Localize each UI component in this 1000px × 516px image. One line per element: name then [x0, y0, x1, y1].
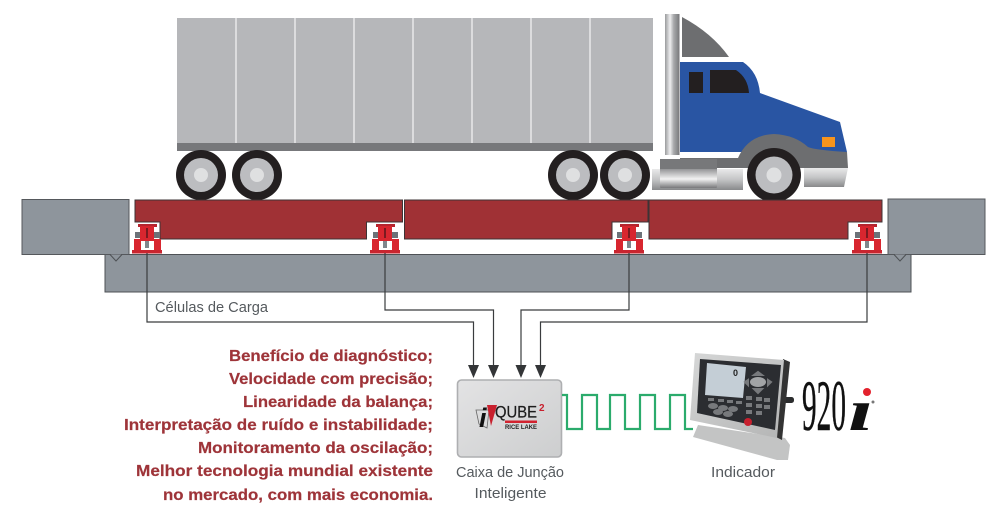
benefits list: Velocidade com precisão; [229, 371, 433, 388]
load cell label: Células de Carga [155, 300, 269, 316]
scale deck [135, 200, 882, 239]
load cell 1 [132, 224, 162, 254]
indicator label: Indicador [711, 465, 775, 481]
wiring arrows [147, 253, 867, 378]
bumper [804, 168, 848, 187]
iQube logo: QUBE [495, 404, 537, 422]
housing [690, 353, 784, 438]
keypad [708, 372, 771, 417]
deck section 3 [649, 200, 882, 239]
junction box label: Inteligente [474, 486, 546, 502]
load cell 3 [614, 224, 644, 254]
benefits list: Interpretação de ruído e instabilidade; [124, 417, 433, 434]
truck [176, 14, 848, 202]
iQube logo: i [479, 403, 487, 433]
trailer front wheels [548, 150, 650, 200]
iQube logo [476, 403, 545, 433]
trailer rear wheels [176, 150, 282, 200]
920i logo: 920 [802, 366, 846, 446]
chassis skirt [652, 169, 743, 190]
junction box label [456, 465, 564, 502]
indicator 920i [690, 353, 794, 460]
cab windows [689, 70, 749, 93]
trailer [177, 18, 653, 151]
exhaust stack [665, 14, 680, 155]
benefits list: no mercado, com mais economia. [163, 487, 433, 504]
deck section 1 [135, 200, 402, 239]
stand [693, 425, 790, 460]
bearing notches [110, 254, 906, 261]
iQube logo: RICE LAKE [505, 424, 538, 431]
fender and chassis [680, 134, 848, 168]
foundation slab [105, 254, 911, 292]
air fairing [682, 17, 729, 57]
iQube logo: 2 [539, 403, 545, 414]
920i logo [802, 366, 874, 446]
cab [680, 62, 847, 152]
benefits list [124, 348, 433, 504]
front wheel [747, 148, 801, 202]
digital signal wave [562, 395, 693, 429]
brand badge [744, 418, 752, 426]
junction box label: Caixa de Junção [456, 465, 564, 481]
face [697, 359, 781, 430]
benefits list: Benefício de diagnóstico; [229, 348, 433, 365]
920i logo: i [848, 378, 873, 443]
right approach block [888, 199, 985, 254]
benefits list: Linearidade da balança; [243, 394, 433, 411]
side of housing [776, 359, 790, 440]
load cell 2 [370, 224, 400, 254]
junction box [458, 380, 562, 457]
benefits list: Monitoramento da oscilação; [198, 440, 433, 457]
fuel tank [660, 159, 717, 188]
headlight [822, 137, 835, 147]
benefits list: Melhor tecnologia mundial existente [136, 463, 433, 480]
left approach block [22, 200, 129, 254]
display [705, 363, 746, 398]
knob [783, 397, 794, 403]
display value: 0 [733, 368, 738, 378]
deck section 2 [404, 200, 648, 239]
load cell 4 [852, 224, 882, 254]
